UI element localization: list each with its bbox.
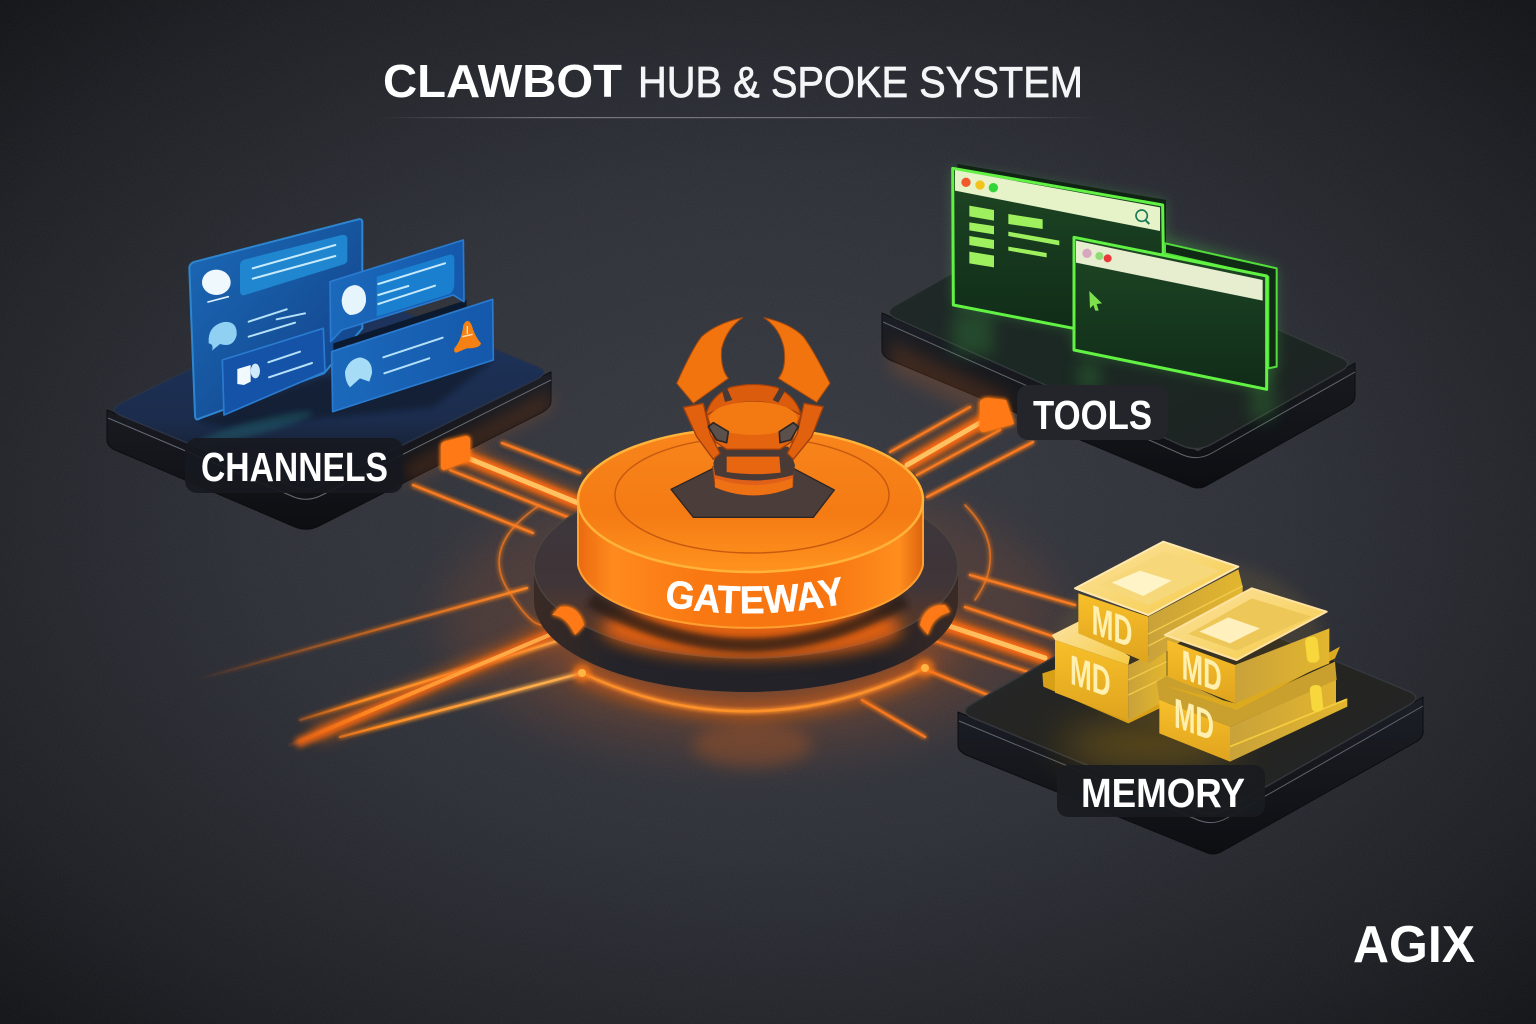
panel shadow	[195, 360, 493, 427]
connection circuit traces	[195, 407, 1075, 737]
platform port	[980, 398, 1014, 432]
platform port	[441, 436, 470, 470]
mascot jaw	[713, 447, 795, 480]
platform base	[882, 313, 1355, 488]
side warm light	[890, 340, 1010, 430]
side warm light	[405, 390, 551, 486]
left claw	[677, 318, 743, 403]
mascot neck	[713, 467, 794, 495]
brand: AGIX: AGIX	[1353, 916, 1475, 974]
dark ring base side	[534, 567, 958, 692]
platform base	[958, 697, 1423, 854]
mascot face	[707, 402, 801, 449]
mascot base	[671, 468, 834, 517]
beam: memory to gateway	[925, 618, 1045, 658]
beam: channels to gateway	[453, 452, 578, 503]
dark ring base top	[534, 476, 958, 658]
green reflection	[952, 312, 1275, 420]
title: HUB & SPOKE SYSTEM	[638, 58, 1083, 107]
nodes on circuit arc	[573, 659, 934, 682]
platform top	[889, 227, 1348, 449]
file stack glow	[1057, 560, 1323, 727]
window: message bubble	[330, 240, 464, 342]
label: gateway	[667, 576, 841, 614]
file: lower right	[1157, 662, 1347, 762]
file: upper left: MD	[1092, 597, 1132, 658]
panel: channels platform	[107, 219, 551, 529]
file: lower left	[1042, 622, 1167, 723]
gap shadow	[333, 300, 467, 350]
window glow	[953, 168, 1277, 389]
mascot side plates	[683, 403, 823, 459]
gold reflection	[1060, 723, 1240, 767]
platform top	[965, 595, 1416, 814]
ring notch	[585, 460, 612, 485]
file: upper right	[1163, 588, 1340, 710]
platform base	[107, 372, 551, 529]
orange cylinder side	[578, 500, 923, 628]
right claw	[764, 318, 830, 402]
panel: memory platform	[958, 542, 1423, 854]
file: upper right: MD	[1182, 642, 1222, 702]
window: alert message	[332, 299, 493, 412]
socket right	[920, 605, 950, 635]
orange cylinder top	[578, 428, 923, 572]
file: lower left: MD	[1070, 647, 1111, 708]
floor light reflection	[692, 723, 812, 767]
label: memory: MEMORY	[1081, 770, 1245, 816]
label: channels: CHANNELS	[201, 444, 388, 490]
label: gateway: GATEWAY	[667, 576, 841, 614]
title	[383, 55, 1083, 107]
window: main chat	[189, 219, 362, 419]
window: browser back	[953, 164, 1166, 330]
socket left	[552, 607, 584, 635]
beam: lower left light streak	[290, 622, 580, 745]
file: upper left	[1075, 542, 1243, 664]
beam: tools to gateway	[907, 413, 997, 465]
icon: crab robot mascot	[671, 318, 834, 517]
platform top	[114, 293, 544, 489]
blue reflection	[195, 406, 315, 450]
hub shadow glow	[531, 570, 961, 710]
ambient hub light	[440, 480, 1060, 760]
mascot eyes	[708, 423, 728, 443]
md files	[1042, 542, 1347, 762]
window: second back layer	[1165, 243, 1277, 368]
tool windows	[953, 164, 1277, 389]
gateway hub	[522, 317, 969, 726]
inner ring line	[615, 437, 889, 553]
panel: tools platform	[882, 164, 1355, 488]
file: lower right: MD	[1174, 690, 1214, 751]
window: small chat	[222, 328, 325, 415]
title: CLAWBOT	[383, 55, 622, 107]
mascot head dome	[706, 384, 801, 415]
window: console	[1074, 237, 1267, 389]
label: tools: TOOLS	[1033, 392, 1152, 438]
hub under glow	[602, 598, 902, 658]
chat windows	[189, 219, 493, 427]
